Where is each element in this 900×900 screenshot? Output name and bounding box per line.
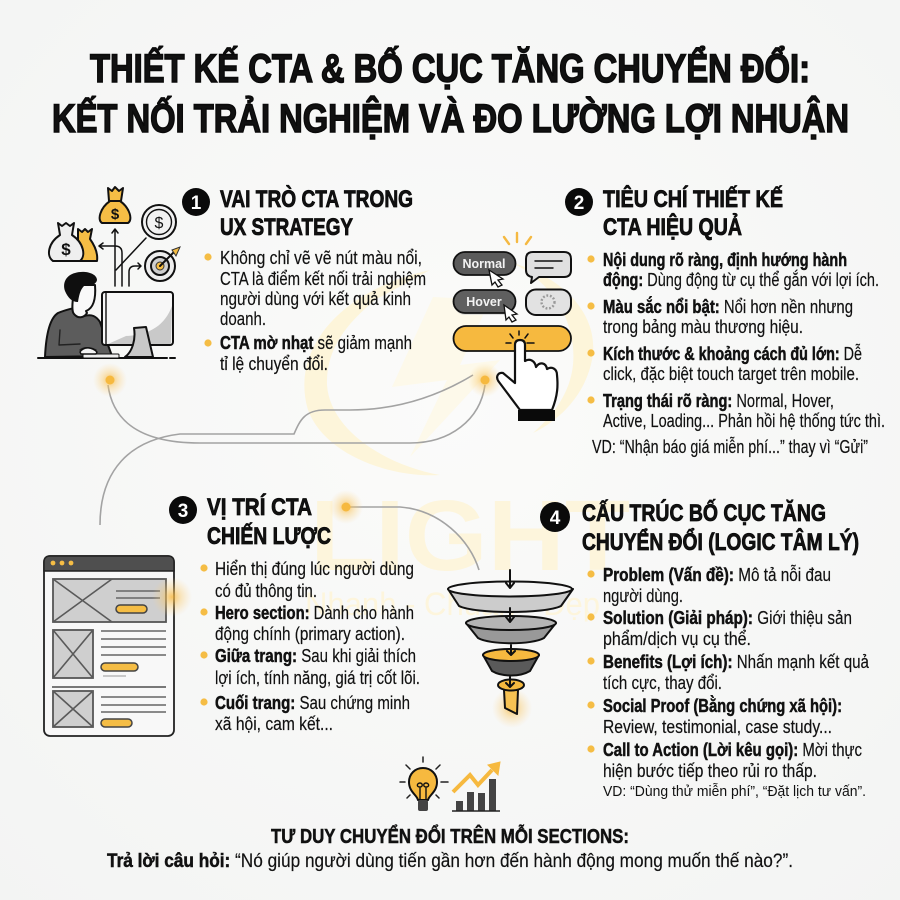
bullets 3: xã hội, cam kết... <box>215 714 333 734</box>
badge 1 <box>182 188 210 216</box>
bullets 3: có đủ thông tin. <box>215 581 317 601</box>
bullets 1: doanh. <box>220 309 266 329</box>
bullets 1: Không chỉ vẽ vẽ nút màu nổi, <box>220 248 422 268</box>
loading button <box>526 290 571 315</box>
heading 2: CTA HIỆU QUẢ <box>603 212 742 241</box>
glow dots <box>93 363 532 728</box>
heading 1: VAI TRÒ CTA TRONG <box>220 185 413 213</box>
bullets 3: Giữa trang: Sau khi giải thích <box>215 646 416 666</box>
panel: section 2 <box>565 185 885 457</box>
bullets 2: trong bảng màu thương hiệu. <box>603 317 803 337</box>
bullets 2: Kích thước & khoảng cách đủ lớn: Dễ <box>603 343 862 364</box>
bullets 1: CTA là điểm kết nối trải nghiệm <box>220 269 426 289</box>
heading 1 <box>220 185 413 241</box>
bullets 2: Nội dung rõ ràng, định hướng hành <box>603 250 847 270</box>
computer <box>38 292 175 358</box>
icon: coin: $ <box>155 215 164 232</box>
badge 3 <box>169 496 197 524</box>
bullets 2: Màu sắc nổi bật: Nổi hơn nền nhưng <box>603 296 853 317</box>
heading 4: CẤU TRÚC BỐ CỤC TĂNG <box>582 499 826 527</box>
watermark logo: LIGHT <box>310 480 630 592</box>
watermark logo <box>304 263 630 622</box>
normal button: Normal <box>462 257 506 271</box>
panel: section 4 <box>540 499 870 800</box>
icon: target <box>145 247 180 281</box>
bullets 4 <box>587 564 870 800</box>
icon: coin <box>142 205 176 239</box>
bullets 4: Social Proof (Bằng chứng xã hội): <box>603 695 842 716</box>
bullets 4: người dùng. <box>603 586 683 606</box>
icon: white money bag <box>49 223 97 261</box>
bullets 4: Review, testimonial, case study... <box>603 717 832 737</box>
hover button: Hover <box>466 295 502 309</box>
bullets 3: Hero section: Dành cho hành <box>215 603 414 623</box>
icon: page wireframe <box>44 556 192 736</box>
icon: gold money bag: $ <box>111 206 120 223</box>
heading 3: CHIẾN LƯỢC <box>207 522 331 550</box>
badge 4: 4 <box>550 508 561 529</box>
footer message: Trả lời câu hỏi: “Nó giúp người dùng tiến gần hơn đến hành động mong muốn thế nào?”. <box>107 851 793 872</box>
icon: gold money bag <box>100 187 130 223</box>
yellow CTA button <box>454 326 571 351</box>
heading 1: UX STRATEGY <box>220 214 353 241</box>
bullets 3: động chính (primary action). <box>215 624 405 644</box>
bullets 3: Hiển thị đúng lúc người dùng <box>215 559 414 579</box>
bullets 3 <box>200 559 420 734</box>
speech bubble <box>526 252 571 283</box>
heading 3: VỊ TRÍ CTA <box>207 493 312 521</box>
bullets 4: tích cực, thay đổi. <box>603 673 722 693</box>
icon: light bulb <box>400 757 448 811</box>
bullets 4: phẩm/dịch vụ cụ thể. <box>603 629 751 649</box>
bullets 3: Cuối trang: Sau chứng minh <box>215 693 410 713</box>
bullets 4: Call to Action (Lời kêu gọi): Mời thực <box>603 740 862 760</box>
badge 2 <box>565 188 593 216</box>
bullets 1: CTA mờ nhạt sẽ giảm mạnh <box>220 333 412 353</box>
icon: growth chart <box>452 762 500 811</box>
heading 2 <box>603 185 783 241</box>
heading 2: TIÊU CHÍ THIẾT KẾ <box>603 185 783 213</box>
bullets 4: hiện bước tiếp theo rủi ro thấp. <box>603 761 817 781</box>
bullets 2: Trạng thái rõ ràng: Normal, Hover, <box>603 391 834 411</box>
connectors <box>100 375 485 570</box>
heading 3 <box>207 493 331 550</box>
person <box>45 272 112 357</box>
footer message: TƯ DUY CHUYỂN ĐỔI TRÊN MỖI SECTIONS: <box>271 824 629 848</box>
badge 3: 3 <box>178 501 188 522</box>
bullets 3: lợi ích, tính năng, giá trị cốt lõi. <box>215 668 420 688</box>
hand <box>497 340 557 421</box>
hover button <box>454 290 517 322</box>
bullets 1: người dùng với kết quả kinh <box>220 289 411 309</box>
watermark logo: Nhanh - Chuẩn - Đẹp <box>305 586 600 622</box>
badge 4 <box>540 502 570 532</box>
panel: section 3 <box>169 493 420 734</box>
footer message <box>107 824 793 872</box>
heading 4 <box>582 499 859 556</box>
icon: person at computer with money and target <box>38 187 180 358</box>
bullets 4: Solution (Giải pháp): Giới thiệu sản <box>603 608 852 628</box>
bullets 1: tỉ lệ chuyển đổi. <box>220 354 328 374</box>
bullets 4: Benefits (Lợi ích): Nhấn mạnh kết quả <box>603 652 870 672</box>
panel: section 1 <box>182 185 426 374</box>
icon: conversion funnel <box>448 570 573 714</box>
rays <box>504 233 531 244</box>
bullets 1 <box>204 248 426 374</box>
icon: button states and clicking hand <box>454 233 571 421</box>
badge 1: 1 <box>191 193 202 214</box>
icon: white money bag: $ <box>61 240 71 259</box>
badge 2: 2 <box>574 193 584 214</box>
bullets 4: VD: “Dùng thử miễn phí”, “Đặt lịch tư vấn”. <box>603 783 866 800</box>
arrows <box>99 229 146 286</box>
bullets 4: Problem (Vấn đề): Mô tả nỗi đau <box>603 564 831 585</box>
normal button <box>454 252 516 287</box>
title <box>52 44 849 141</box>
bullets 2 <box>587 250 885 457</box>
